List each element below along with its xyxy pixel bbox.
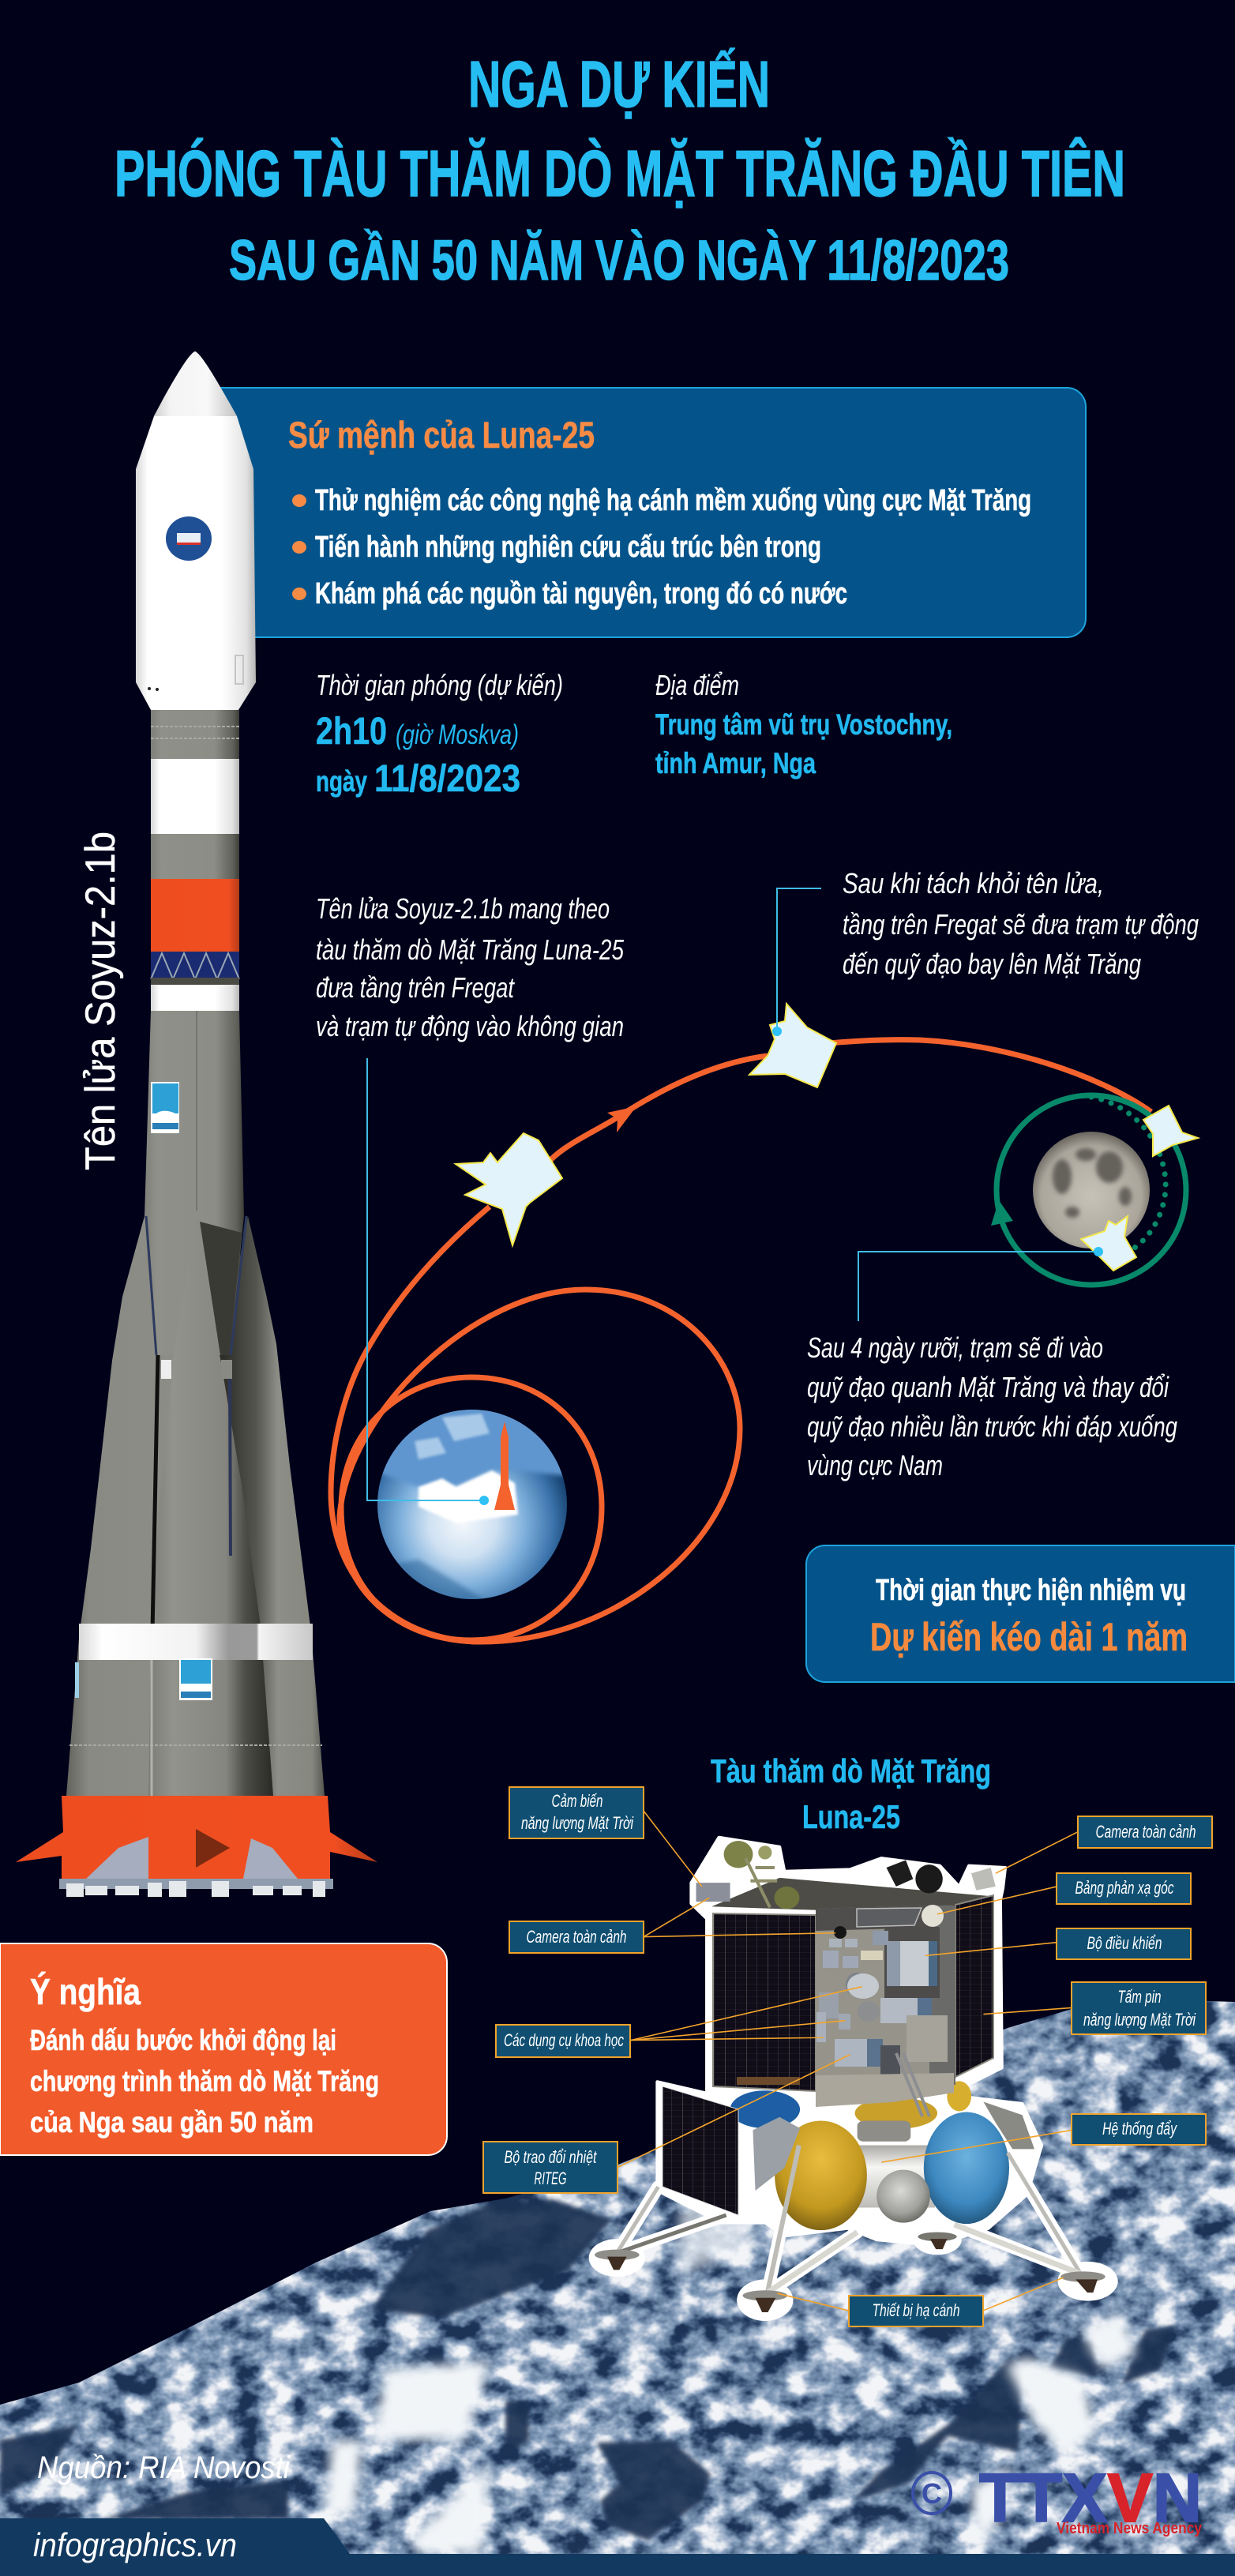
blue tank xyxy=(924,2112,1009,2224)
top cameras xyxy=(696,1860,996,1902)
rocket: Soyuz-2.1b xyxy=(16,351,377,1897)
label: solar sensor: Cảm biến xyxy=(551,1791,603,1811)
panel: significance: Ý nghĩa xyxy=(30,1971,141,2012)
foot pads xyxy=(595,2232,1105,2312)
white fringe: legs xyxy=(617,2146,1080,2292)
logo: TTXVN: Vietnam News Agency xyxy=(1057,2520,1203,2537)
orange orbits xyxy=(331,1040,1151,1642)
label: solar sensor: năng lượng Mặt Trời xyxy=(521,1813,634,1833)
diagram: flight path xyxy=(331,888,1198,1642)
spacecraft icon 3 xyxy=(1143,1106,1198,1156)
spacecraft icon 1 xyxy=(456,1133,562,1245)
caption: rocket carries Luna-25: Tên lửa Soyuz-2.1b mang theo xyxy=(316,892,610,925)
label: solar panels: Tấm pin xyxy=(1118,1987,1161,2007)
yellow tank xyxy=(775,2120,867,2230)
logo patch upper xyxy=(151,1082,179,1133)
caption: rocket carries Luna-25 xyxy=(316,892,625,1042)
truss right xyxy=(983,2102,1034,2149)
arrow xyxy=(607,1106,636,1132)
panel: significance: chương trình thăm dò Mặt Trăng xyxy=(30,2065,379,2097)
nozzles xyxy=(59,1879,333,1897)
launch time xyxy=(316,669,563,800)
bullets list xyxy=(292,484,1031,610)
caption: rocket carries Luna-25: tàu thăm dò Mặt Trăng Luna-25 xyxy=(316,933,625,966)
source: Nguồn: RIA Novosti xyxy=(37,2450,291,2485)
caption: rocket carries Luna-25: đưa tầng trên Fregat xyxy=(316,971,516,1004)
label: landing gear xyxy=(849,2296,983,2326)
label: scientific instruments xyxy=(496,2025,630,2057)
label: corner reflector: Bảng phản xạ góc xyxy=(1075,1878,1173,1898)
heading: Luna-25: Luna-25 xyxy=(802,1798,900,1835)
spacecraft icon 4 xyxy=(1081,1216,1136,1271)
caption: lunar orbit: Sau 4 ngày rưỡi, trạm sẽ đi vào xyxy=(807,1331,1103,1364)
white band xyxy=(79,1624,313,1660)
panel: significance xyxy=(0,1943,447,2155)
launch time: 2h10 xyxy=(316,711,387,753)
moon xyxy=(1033,1132,1150,1249)
grey sphere xyxy=(877,2170,930,2223)
heading: mission: Sứ mệnh của Luna-25 xyxy=(288,414,595,456)
heading: Luna-25 xyxy=(711,1752,991,1835)
label: panoramic camera right xyxy=(1078,1816,1212,1848)
label: scientific instruments: Các dụng cụ khoa học xyxy=(504,2030,624,2050)
panel: significance: của Nga sau gần 50 năm xyxy=(30,2106,313,2139)
orange skirt and fins xyxy=(16,1796,377,1879)
upper stages xyxy=(151,710,239,1011)
logo patch lower xyxy=(179,1658,212,1700)
side boosters and core xyxy=(66,1011,325,1796)
title xyxy=(114,47,1125,292)
mini rocket on earth xyxy=(494,1421,515,1510)
leader: moon xyxy=(858,1247,1103,1321)
label: RITEG: Bộ trao đổi nhiệt xyxy=(504,2147,597,2167)
leader lines xyxy=(618,1811,1078,2311)
caption: rocket carries Luna-25: và trạm tự động vào không gian xyxy=(316,1010,624,1042)
lunar surface xyxy=(0,1974,1235,2576)
label: controller xyxy=(1057,1928,1191,1959)
launch time: (giờ Moskva) xyxy=(396,719,519,750)
label: RITEG: RITEG xyxy=(534,2169,567,2188)
earth xyxy=(377,1410,567,1599)
title: NGA DỰ KIẾN xyxy=(468,47,770,121)
label: propulsion: Hệ thống đẩy xyxy=(1102,2119,1177,2139)
caption: lunar orbit: vùng cực Nam xyxy=(807,1449,943,1481)
white outline: lower body xyxy=(657,2082,1042,2245)
launch time: 11/8/2023 xyxy=(374,758,520,800)
heading: Luna-25: Tàu thăm dò Mặt Trăng xyxy=(711,1752,991,1789)
antennas xyxy=(724,1841,799,1909)
launch location: Địa điểm xyxy=(655,669,739,701)
propellant cylinder xyxy=(858,2146,935,2207)
launch location: Trung tâm vũ trụ Vostochny, xyxy=(655,708,952,741)
caption: after separation xyxy=(843,867,1199,980)
panel: mission duration xyxy=(806,1545,1235,1682)
bullets list: Khám phá các nguồn tài nguyên, trong đó có nước xyxy=(315,577,847,610)
label: solar panels: năng lượng Mặt Trời xyxy=(1083,2010,1196,2030)
label: solar panels xyxy=(1072,1982,1206,2034)
launch time: Thời gian phóng (dự kiến) xyxy=(316,669,563,701)
rear yellow tanks xyxy=(855,2097,937,2129)
top deck xyxy=(711,1878,989,1910)
fairing xyxy=(136,351,256,710)
vertical label: rocket name: Tên lửa Soyuz-2.1b xyxy=(77,832,124,1170)
footer bar xyxy=(0,2518,1235,2576)
spacecraft icon 2 xyxy=(749,1004,836,1087)
logo: TTXVN: TTXVN xyxy=(979,2460,1202,2537)
label: landing gear: Thiết bị hạ cánh xyxy=(872,2300,960,2320)
website: infographics.vn xyxy=(33,2526,237,2563)
lander outline and lower hardware xyxy=(589,1838,1118,2321)
logo: TTXVN: C xyxy=(922,2477,942,2510)
solar panels xyxy=(663,1895,993,2215)
bullets list: Tiến hành những nghiên cứu cấu trúc bên trong xyxy=(315,531,821,564)
leader: earth xyxy=(367,1058,489,1505)
panel: mission of Luna-25 xyxy=(197,388,1086,637)
rear blue tank xyxy=(730,2090,800,2128)
lander: Luna-25 xyxy=(589,1811,1118,2321)
launch location: tỉnh Amur, Nga xyxy=(655,747,816,779)
launch location xyxy=(655,669,952,779)
caption: after separation: Sau khi tách khỏi tên lửa, xyxy=(843,867,1104,899)
label: panoramic camera left: Camera toàn cảnh xyxy=(526,1927,627,1947)
label: RITEG xyxy=(483,2142,618,2193)
emblem xyxy=(166,516,212,561)
caption: after separation: đến quỹ đạo bay lên Mặt Trăng xyxy=(843,948,1141,980)
caption: lunar orbit xyxy=(807,1331,1177,1481)
label: solar sensor xyxy=(509,1787,644,1838)
truss left xyxy=(753,2117,800,2191)
equipment bay xyxy=(816,1905,955,2116)
moon orbit xyxy=(991,1095,1186,1285)
label: corner reflector xyxy=(1057,1873,1191,1904)
label: panoramic camera right: Camera toàn cảnh xyxy=(1096,1822,1196,1842)
label: propulsion xyxy=(1072,2114,1206,2145)
white outline: upper body xyxy=(691,1838,1005,2115)
white fringe: feet xyxy=(589,2225,1118,2321)
launch time: ngày xyxy=(316,765,367,798)
legs xyxy=(617,2146,1080,2292)
leader: top xyxy=(772,888,821,1036)
label: panoramic camera left xyxy=(509,1921,644,1953)
label: controller: Bộ điều khiển xyxy=(1087,1933,1162,1953)
panel: significance: Đánh dấu bước khởi động lại xyxy=(30,2024,336,2056)
